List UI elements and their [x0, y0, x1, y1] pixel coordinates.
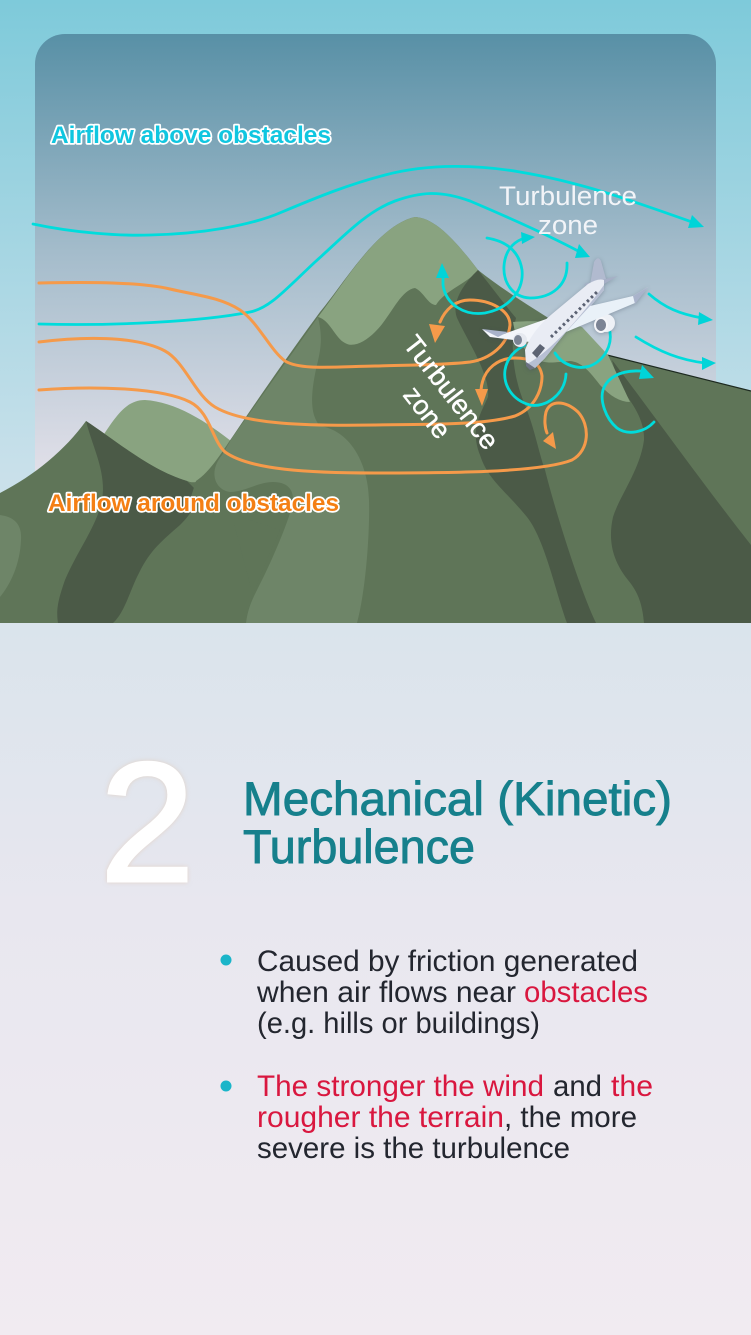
mountain: peak highlight [318, 217, 478, 345]
plane: tail stabilizer [584, 276, 618, 291]
plane: near wing tip [633, 287, 648, 304]
mountain: central shadow band [455, 270, 596, 623]
mountain: left hill [0, 421, 260, 623]
bullet text [257, 1070, 653, 1165]
bullet: friction [220, 945, 648, 1040]
curl: cyan E [602, 371, 654, 432]
turbulence curls [436, 232, 716, 432]
line: cyan exit flow lower [636, 337, 705, 363]
plane: near engine [597, 314, 615, 332]
mountain: main body light area [214, 317, 369, 623]
arrow: cyan exit flow lower [702, 357, 716, 370]
airflow around obstacles lines [39, 283, 586, 473]
curl: cyan B [504, 239, 567, 298]
arrow: orange flow 1 [429, 324, 445, 343]
bullet text: The stronger the wind [257, 1070, 544, 1103]
line: lower cyan flow [39, 193, 580, 324]
label: upper turbulence zone: zone [538, 210, 598, 240]
plane: far wing tip [482, 329, 508, 337]
line: orange flow 1 [39, 283, 510, 367]
bullet: wind and terrain [220, 1070, 653, 1165]
label: upper turbulence zone: Turbulence [499, 181, 637, 211]
plane: far engine intake [514, 335, 522, 345]
arrow: orange flow 2 [475, 389, 488, 406]
bullet text [256, 945, 648, 1040]
heading: Mechanical (Kinetic) [243, 772, 672, 825]
curl: cyan C [555, 332, 610, 367]
plane: near wing [566, 287, 648, 332]
plane: fuselage [525, 280, 604, 368]
line: upper cyan flow [33, 166, 692, 235]
mountain: right shadow band [611, 360, 751, 623]
illustration: mountains [0, 217, 751, 623]
arrow: curl E [639, 365, 654, 379]
mountain: back light hill [100, 400, 240, 500]
mountain: lit slope strip [513, 321, 630, 402]
plane: nose tip [526, 362, 535, 370]
bullet text: the [611, 1070, 653, 1103]
line: orange flow 3 [39, 388, 586, 473]
section number: 2 [100, 728, 195, 918]
label: rotated turbulence zone: Turbulence [397, 330, 505, 455]
mountain: ridge outline [607, 355, 751, 391]
mountain: base fill [0, 500, 751, 623]
mountain: right ridge [480, 355, 751, 623]
bullet text: when air flows near [256, 976, 516, 1009]
plane: cabin windows [551, 291, 598, 337]
panel: sky [35, 34, 716, 554]
label: airflow above obstacles: Airflow above obstacles [51, 122, 331, 149]
arrow: cyan exit flow upper [698, 312, 713, 325]
arrow: curl B [521, 232, 535, 244]
curl: cyan D [505, 345, 566, 405]
plane: far engine [513, 333, 527, 347]
plane: cockpit [532, 344, 545, 358]
bullet text: and [553, 1070, 602, 1103]
line: orange flow 2 [39, 338, 542, 425]
curl: cyan A [443, 238, 522, 313]
plane: far wing [482, 317, 552, 342]
bullet text: , the more [504, 1101, 637, 1134]
heading [243, 772, 672, 873]
line: cyan exit flow upper [649, 294, 702, 318]
mountain: left hill light patch [0, 515, 21, 597]
bullet text: severe is the turbulence [257, 1132, 570, 1165]
plane: fuselage belly [527, 285, 604, 368]
bullet text: obstacles [524, 976, 648, 1009]
mountain: left hill shadow [57, 421, 197, 623]
arrow: orange flow 3 [543, 432, 556, 449]
bullet dot [220, 954, 232, 966]
arrow: curl A [436, 263, 449, 278]
label: upper turbulence zone [499, 181, 637, 240]
bullet dot [220, 1080, 232, 1092]
label: airflow around obstacles: Airflow around obstacles [48, 490, 339, 517]
label: rotated turbulence zone: zone [397, 380, 457, 445]
plane: near engine intake [595, 318, 607, 332]
bullet text: (e.g. hills or buildings) [257, 1007, 540, 1040]
arrow: upper cyan flow [688, 215, 704, 228]
arrow: lower cyan flow [575, 244, 590, 258]
heading: Turbulence [243, 820, 475, 873]
icon: airplane [482, 258, 648, 370]
bullet text: rougher the terrain [257, 1101, 504, 1134]
bullet text: Caused by friction generated [257, 945, 638, 978]
airflow above obstacles lines [33, 166, 704, 324]
mountain: main body [190, 217, 751, 623]
plane: tail fin [590, 258, 606, 285]
